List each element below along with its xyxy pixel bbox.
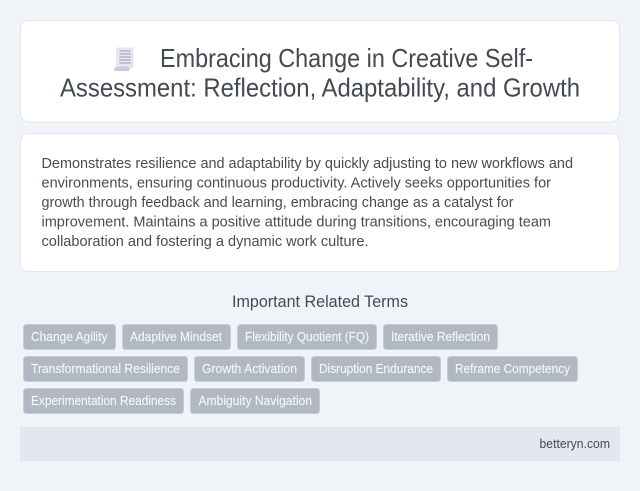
- tag: Change Agility: [24, 324, 116, 350]
- panel: title card: [20, 20, 620, 122]
- tag: Flexibility Quotient: [238, 324, 376, 350]
- description text: collaboration and fostering a dynamic work culture.: [42, 233, 368, 250]
- tag: Iterative Reflection: Iterative Reflection: [391, 330, 490, 344]
- footer bar: [20, 427, 620, 461]
- title: [60, 43, 580, 102]
- tag: Transformational Resilience: Transformational Resilience: [31, 362, 180, 376]
- tag: Ambiguity Navigation: [190, 388, 320, 414]
- title: Embracing Change in Creative Self-: [160, 43, 533, 73]
- tag: Growth Activation: [194, 356, 304, 382]
- tag: Adaptive Mindset: [122, 324, 230, 350]
- description text: improvement. Maintains a positive attitude during transitions, encouraging team: [42, 214, 551, 230]
- tag list: [24, 324, 578, 414]
- description text: growth through feedback and learning, embracing change as a catalyst for: [42, 194, 514, 211]
- tag: Disruption Endurance: [312, 356, 440, 382]
- tag: Adaptive Mindset: Adaptive Mindset: [130, 330, 222, 344]
- tag: Flexibility Quotient: Flexibility Quotient (FQ): [245, 330, 369, 344]
- title: Assessment: Reflection, Adaptability, and Growth: [60, 72, 580, 102]
- description text: Demonstrates resilience and adaptability by quickly adjusting to new workflows and: [42, 155, 573, 172]
- heading: important related terms: Important Related Terms: [232, 293, 408, 311]
- tag: Reframe Competency: [448, 356, 578, 382]
- tag: Reframe Competency: Reframe Competency: [455, 362, 571, 376]
- tag: Transformational Resilience: [24, 356, 188, 382]
- description text: environments, ensuring continuous productivity. Actively seeks opportunities for: [42, 174, 551, 192]
- description text: [42, 155, 573, 250]
- tag: Experimentation Readiness: [24, 388, 184, 414]
- tag: Experimentation Readiness: Experimentation Readiness: [31, 394, 176, 408]
- tag: Growth Activation: Growth Activation: [202, 362, 297, 376]
- footer source text: betteryn.com: [540, 436, 610, 451]
- tag: Change Agility: Change Agility: [31, 330, 108, 344]
- tag: Ambiguity Navigation: Ambiguity Navigation: [198, 394, 312, 408]
- tag: Iterative Reflection: [384, 324, 498, 350]
- panel: description card: [20, 134, 620, 272]
- tag: Disruption Endurance: Disruption Endurance: [319, 362, 433, 376]
- icon: paper scroll: [114, 48, 134, 71]
